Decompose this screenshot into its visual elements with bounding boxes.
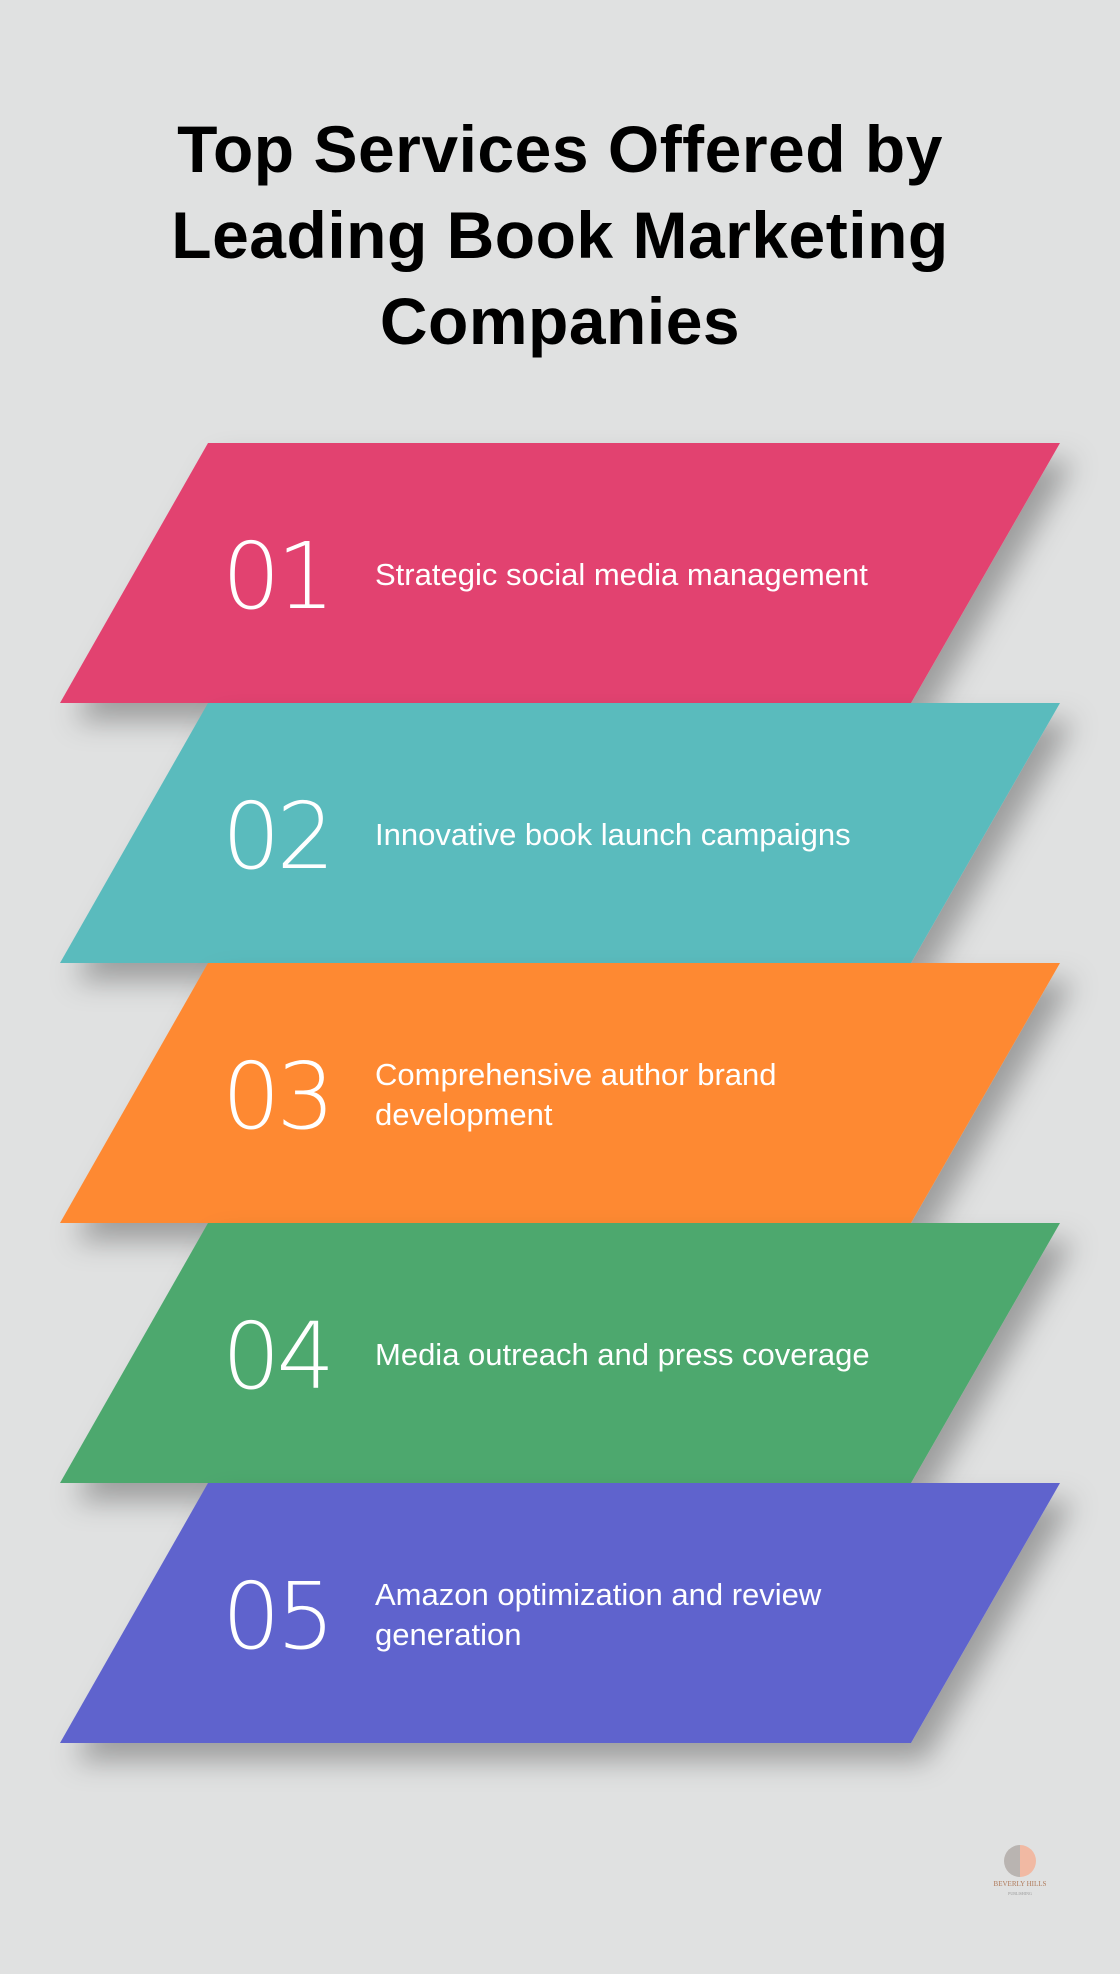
title (171, 112, 949, 358)
number 03: 03 (222, 1043, 331, 1150)
text 03: Comprehensive author brand (375, 1057, 777, 1092)
title: Top Services Offered by (177, 112, 943, 186)
logo text: PUBLISHING (1008, 1891, 1032, 1896)
title: Leading Book Marketing (171, 198, 949, 272)
number 05: 05 (222, 1563, 331, 1670)
logo text (994, 1880, 1046, 1896)
logo emblem (1004, 1845, 1036, 1877)
number 01: 01 (222, 523, 331, 630)
band 04 (60, 1223, 1060, 1483)
text 04: Media outreach and press coverage (375, 1337, 870, 1372)
text 05: Amazon optimization and review (375, 1577, 821, 1612)
title: Companies (380, 284, 740, 358)
text 05 (375, 1577, 822, 1652)
number 04: 04 (222, 1303, 331, 1410)
text 03 (375, 1057, 777, 1132)
band 05 (60, 1483, 1060, 1743)
text 02: Innovative book launch campaigns (375, 817, 851, 852)
logo text: BEVERLY HILLS (994, 1880, 1046, 1888)
text 01: Strategic social media management (375, 557, 868, 592)
band 02 (60, 703, 1060, 963)
number 02: 02 (222, 783, 331, 890)
text 03: development (375, 1097, 553, 1132)
text 05: generation (375, 1617, 522, 1652)
logo (994, 1845, 1046, 1896)
band 01 (60, 443, 1060, 703)
band 03 (60, 963, 1060, 1223)
